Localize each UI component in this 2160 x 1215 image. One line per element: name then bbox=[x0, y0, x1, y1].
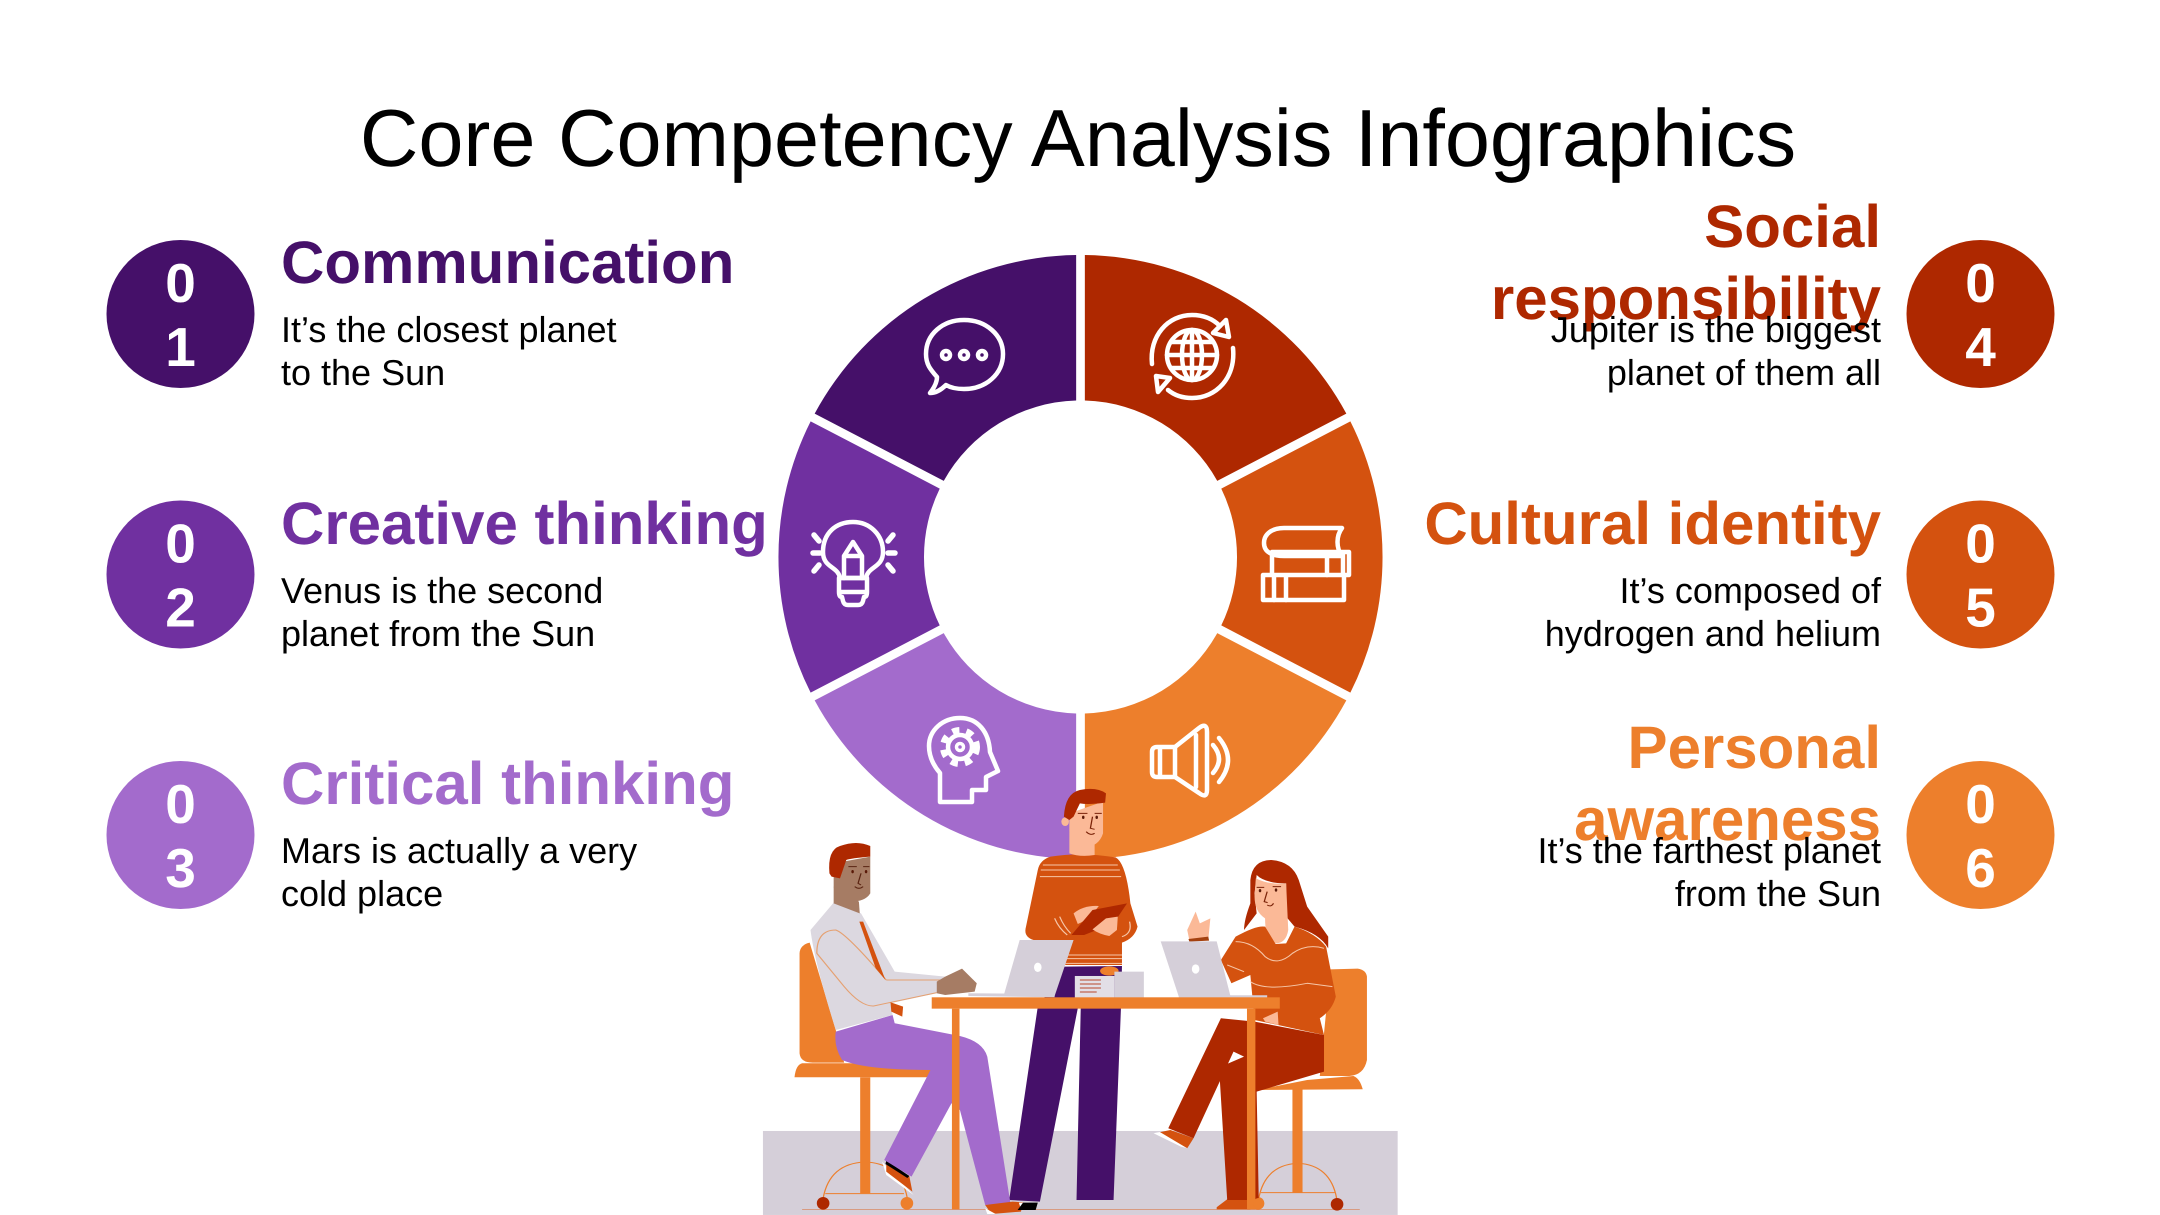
number badge 05: 5 bbox=[1965, 576, 1996, 638]
heading: social responsibility: responsibility bbox=[1491, 265, 1882, 332]
number badge 05 bbox=[1906, 500, 2054, 648]
description 02: Venus is the second bbox=[281, 570, 603, 611]
laptop left bbox=[968, 940, 1074, 997]
documents on table bbox=[1075, 966, 1144, 998]
number badge 01: 1 bbox=[165, 316, 196, 378]
floor bbox=[763, 1131, 1398, 1215]
heading: social responsibility: Social bbox=[1704, 193, 1881, 260]
number badge 04: 0 bbox=[1965, 252, 1996, 314]
description 02 bbox=[281, 570, 603, 654]
panel: 02 creative thinking bbox=[106, 490, 768, 654]
number badge 04 bbox=[1906, 240, 2054, 388]
seated woman bbox=[1154, 860, 1336, 1209]
heading: social responsibility bbox=[1491, 193, 1882, 332]
description 05: It’s composed of bbox=[1620, 570, 1882, 611]
description 01 bbox=[281, 309, 617, 393]
description 04: Jupiter is the biggest bbox=[1551, 309, 1881, 350]
description 06: from the Sun bbox=[1675, 873, 1881, 914]
number badge 06 bbox=[1906, 761, 2054, 909]
heading: communication: Communication bbox=[281, 229, 734, 296]
number badge 03: 0 bbox=[165, 773, 196, 835]
donut chart bbox=[778, 255, 1383, 859]
right chair bbox=[1252, 969, 1367, 1211]
number badge 02: 0 bbox=[165, 512, 196, 574]
panel: 04 social responsibility bbox=[1491, 193, 2054, 393]
panel: 03 critical thinking bbox=[106, 750, 734, 914]
segment: personal awareness bbox=[1085, 633, 1346, 859]
icon: speaker bbox=[1152, 726, 1228, 795]
segment: critical thinking bbox=[815, 633, 1076, 859]
icon: light bulb with pencil bbox=[813, 522, 895, 605]
laptop right bbox=[1161, 941, 1267, 999]
heading: critical thinking: Critical thinking bbox=[281, 750, 734, 817]
panel: 01 communication bbox=[106, 229, 734, 393]
title: Core Competency Analysis Infographics bbox=[360, 94, 1796, 184]
number badge 06: 0 bbox=[1965, 773, 1996, 835]
heading: personal awareness bbox=[1574, 714, 1881, 853]
number badge 02: 2 bbox=[165, 576, 196, 638]
description 01: to the Sun bbox=[281, 352, 445, 393]
heading: personal awareness: awareness bbox=[1574, 786, 1881, 853]
left chair bbox=[795, 943, 933, 1210]
number badge 02 bbox=[106, 500, 254, 648]
heading: creative thinking: Creative thinking bbox=[281, 490, 768, 557]
icon: globe with arrows bbox=[1152, 315, 1233, 398]
standing man bbox=[1009, 789, 1138, 1202]
description 02: planet from the Sun bbox=[281, 613, 595, 654]
description 01: It’s the closest planet bbox=[281, 309, 617, 350]
icon: head with gear bbox=[929, 718, 998, 802]
panel: 05 cultural identity bbox=[1424, 490, 2054, 654]
number badge 01 bbox=[106, 240, 254, 388]
description 03: cold place bbox=[281, 873, 443, 914]
description 05: hydrogen and helium bbox=[1545, 613, 1881, 654]
description 06 bbox=[1537, 830, 1881, 914]
segment: communication bbox=[815, 255, 1076, 481]
description 03: Mars is actually a very bbox=[281, 830, 637, 871]
segment: creative thinking bbox=[778, 421, 940, 693]
seated man bbox=[811, 843, 1038, 1214]
segment: cultural identity bbox=[1221, 421, 1383, 693]
heading: personal awareness: Personal bbox=[1628, 714, 1881, 781]
number badge 03 bbox=[106, 761, 254, 909]
number badge 05: 0 bbox=[1965, 512, 1996, 574]
panel: 06 personal awareness bbox=[1537, 714, 2054, 914]
description 06: It’s the farthest planet bbox=[1537, 830, 1881, 871]
description 05 bbox=[1545, 570, 1882, 654]
table bbox=[932, 997, 1280, 1209]
number badge 06: 6 bbox=[1965, 837, 1996, 899]
number badge 01: 0 bbox=[165, 252, 196, 314]
illustration: team meeting at a table bbox=[763, 789, 1398, 1215]
icon: speech bubble bbox=[926, 320, 1003, 393]
number badge 04: 4 bbox=[1965, 316, 1996, 378]
description 04: planet of them all bbox=[1607, 352, 1881, 393]
number badge 03: 3 bbox=[165, 837, 196, 899]
icon: stack of books bbox=[1263, 528, 1349, 600]
heading: cultural identity: Cultural identity bbox=[1424, 490, 1882, 557]
segment: social responsibility bbox=[1085, 255, 1346, 481]
description 04 bbox=[1551, 309, 1881, 393]
description 03 bbox=[281, 830, 637, 914]
